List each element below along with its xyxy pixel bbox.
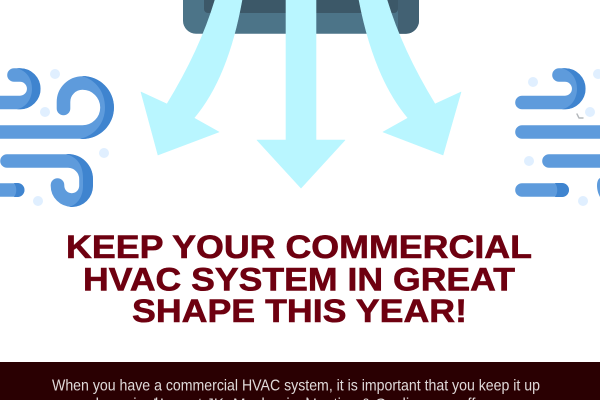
title: SHAPE THIS YEAR! [132,293,467,329]
icon: center airflow arrow [257,0,345,188]
icon: right wind swirls [522,68,600,206]
title [66,229,532,329]
title: HVAC SYSTEM IN GREAT [83,262,516,298]
icon: left wind swirls [0,68,114,207]
icon: HVAC ceiling unit [183,0,419,34]
panel: intro footer band [0,362,600,400]
title: KEEP YOUR COMMERCIAL [66,229,532,265]
icon: small cursor mark [577,114,583,118]
icon: left airflow arrow [141,0,242,155]
text block: intro paragraph: When you have a commercial HVAC system, it is important that you keep it up [52,378,540,394]
text block: intro paragraph [52,378,540,400]
icon: right airflow arrow [359,0,461,155]
